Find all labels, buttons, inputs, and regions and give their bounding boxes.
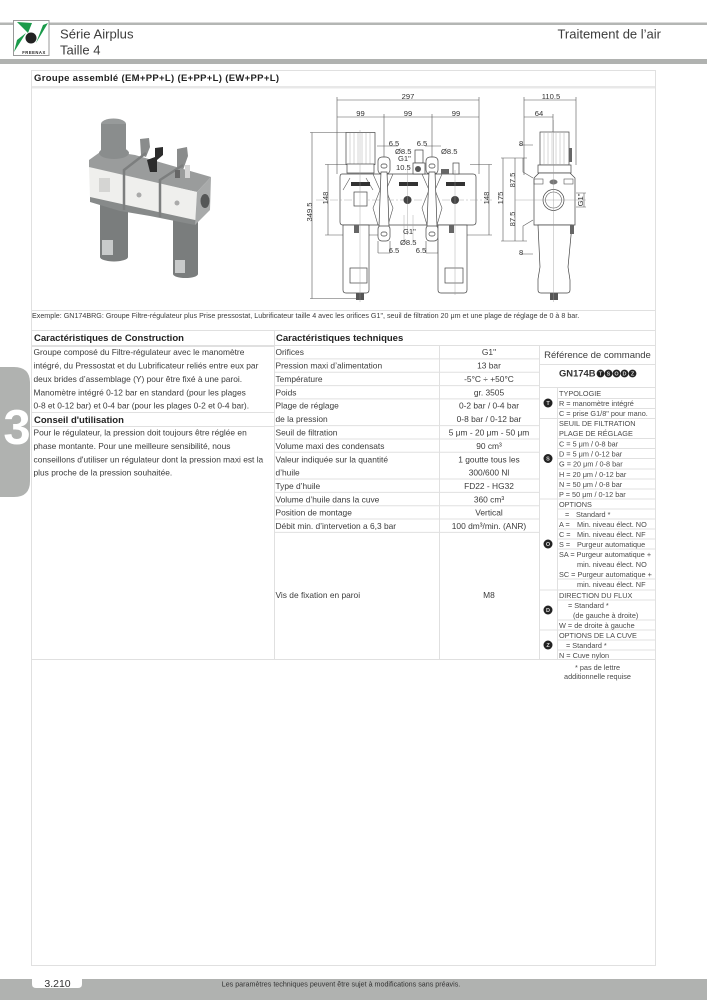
order key options: Min. niveau élect. NO [577, 520, 647, 529]
order key options: = [565, 510, 569, 519]
order key options: SEUIL DE FILTRATION [559, 419, 636, 428]
footer band [0, 979, 707, 1000]
order key options: Standard * [576, 510, 611, 519]
technical table labels: Type d’huile [276, 481, 321, 491]
text: usage advice: Pour le régulateur, la pression doit toujours être réglée en [34, 428, 247, 438]
straps [124, 153, 183, 217]
text: construction description: 0-8 et 0-12 bar) et 0-4 bar (pour les plages 0-2 et 0-4 bar). [34, 401, 249, 411]
technical table values: gr. 3505 [474, 387, 504, 397]
text: usage advice: phase montante. Pour une meilleure sensibilité, nous [34, 441, 230, 451]
technical table values: 100 dm³/min. (ANR) [452, 521, 526, 531]
dimension values: Ø8.5 [400, 238, 416, 247]
technical table labels: Poids [276, 387, 296, 397]
bowl side [538, 225, 572, 293]
technical table labels: Pression maxi d’alimentation [276, 360, 382, 370]
dimension values side [496, 92, 585, 257]
technical table values: 90 cm³ [476, 441, 502, 451]
body top [89, 150, 211, 192]
title: series: Série Airplus [60, 26, 134, 42]
lower strip [90, 197, 195, 225]
heading: construction: Caractéristiques de Construction [34, 333, 184, 344]
technical table labels: Débit min. d’intervetion a 6,3 bar [276, 521, 396, 531]
order key options: N = 50 μm / 0-8 bar [559, 480, 623, 489]
order key options: = Standard * [568, 601, 609, 610]
heading underline [32, 86, 655, 88]
technical table labels: de la pression [276, 414, 328, 424]
order key options: P = 50 μm / 0-12 bar [559, 490, 626, 499]
order code: T [599, 372, 603, 378]
filter and lubricator bowls [343, 225, 369, 293]
page number [32, 978, 82, 990]
order key bullets: D [546, 608, 550, 614]
dimension values: 6.5 [389, 246, 399, 255]
body side [534, 173, 575, 225]
left bowl [100, 200, 128, 257]
order key options: DIRECTION DU FLUX [559, 591, 633, 600]
header bar top [0, 22, 707, 25]
order key options: A = [559, 520, 570, 529]
bracket tabs [140, 138, 150, 157]
text: construction description: intégré, du Pressostat et du Lubrificateur reliés entre eux par [34, 360, 259, 370]
body blocks [340, 174, 476, 225]
cap [101, 118, 126, 130]
dimension values side: G1" [576, 193, 585, 206]
logo: Freenax: FREENAX [22, 50, 46, 55]
technical table values: 1 goutte tous les [458, 454, 520, 464]
technical table labels: Position de montage [276, 508, 352, 518]
order key options: W = de droite à gauche [559, 621, 635, 630]
main panel frame [32, 70, 656, 966]
dimension values: 297 [402, 92, 414, 101]
technical table labels: Volume maxi des condensats [276, 441, 384, 451]
dimension values: G1" [398, 154, 411, 163]
order key options: H = 20 μm / 0-12 bar [559, 470, 627, 479]
side tab: chapter 3: 3 [3, 401, 31, 455]
technical table labels: Valeur indiquée sur la quantité [276, 454, 388, 464]
dimension values: 6.5 [389, 139, 399, 148]
order code: S [607, 372, 611, 378]
order key options: OPTIONS DE LA CUVE [559, 631, 637, 640]
technical table values [449, 347, 529, 600]
dimension values side: 175 [496, 192, 505, 204]
text: construction description: Manomètre intégré 0-12 bar en standard (pour les plages [34, 387, 246, 397]
dimension values: 99 [404, 109, 412, 118]
order key options: min. niveau élect. NF [577, 580, 646, 589]
technical table labels: Plage de réglage [276, 401, 339, 411]
technical drawing: side view [496, 92, 586, 302]
technical table labels [276, 347, 396, 600]
technical table values: 0-2 bar / 0-4 bar [459, 401, 519, 411]
technical table values: G1" [482, 347, 496, 357]
technical table labels: Température [276, 374, 323, 384]
heading: usage advice: Conseil d'utilisation [34, 415, 124, 426]
dimension values: 6.5 [417, 139, 427, 148]
table grid lines [32, 310, 655, 660]
order code: D [623, 372, 627, 378]
order key footnote: * pas de lettre [575, 663, 620, 672]
order key options: SA = Purgeur automatique + [559, 550, 651, 559]
technical table values: -5°C ÷ +50°C [464, 374, 514, 384]
regulator cap [346, 132, 375, 164]
order code: O [614, 372, 619, 378]
order key options: N = Cuve nylon [559, 651, 609, 660]
dimension values side: 110.5 [542, 92, 560, 101]
order code: GN174B [559, 368, 596, 378]
fittings [175, 170, 180, 178]
page number: 3.210 [44, 978, 71, 990]
order key footnote [564, 663, 631, 681]
pressure switch [147, 147, 163, 172]
pressure switch [415, 150, 423, 163]
dimension values: 99 [452, 109, 460, 118]
order key options: C = 5 μm / 0-8 bar [559, 440, 619, 448]
order key bullets: S [546, 456, 550, 462]
dimension values side: 64 [535, 109, 543, 118]
dimension values: 10.5 [396, 163, 411, 172]
subtitle: size: Taille 4 [60, 42, 100, 58]
order key options: Min. niveau élect. NF [577, 530, 646, 539]
order key bullets [544, 398, 552, 650]
technical table labels: Volume d’huile dans la cuve [276, 494, 380, 504]
order key options: min. niveau élect. NO [577, 560, 647, 569]
order reference heading: Référence de commande [544, 350, 651, 361]
text: usage advice: plus proche de la pression souhaitée. [34, 468, 172, 478]
text: construction description: deux brides d’assemblage (Y) pour être fixé à une paroi. [34, 374, 242, 384]
labels on blocks [351, 182, 370, 186]
order code [559, 368, 636, 378]
dimension values: Ø8.5 [441, 147, 457, 156]
dimension lines [310, 97, 492, 298]
right side [195, 177, 211, 225]
order key options: G = 20 μm / 0-8 bar [559, 460, 623, 468]
heading: technical characteristics: Caractéristiques techniques [276, 333, 403, 344]
technical table labels: Vis de fixation en paroi [276, 590, 360, 600]
technical table values: 360 cm³ [474, 494, 504, 504]
section title: Traitement de l’air [557, 26, 662, 42]
text: construction description: Groupe composé du Filtre-régulateur avec le manomètre [34, 347, 245, 357]
technical table values: 5 μm - 20 μm - 50 μm [449, 428, 529, 438]
dimension values side: 87.5 [508, 212, 517, 226]
text: usage advice: conseillons d'utiliser un régulateur dont la pression maxi est la [34, 454, 264, 464]
right bowl [173, 220, 198, 274]
dimension values: G1" [403, 227, 416, 236]
brackets [378, 157, 438, 241]
order key options: (de gauche à droite) [573, 611, 638, 620]
white front [89, 167, 197, 221]
order key bullets: O [546, 542, 551, 548]
technical table labels: d’huile [276, 468, 300, 478]
order key bullets: Z [546, 643, 550, 649]
dimension values: 148 [321, 192, 330, 204]
order key options: D = 5 μm / 0-12 bar [559, 450, 623, 458]
order key options [559, 389, 652, 660]
dimension values [305, 92, 491, 255]
order key options: Purgeur automatique [577, 540, 645, 549]
side tab: chapter 3 [0, 367, 31, 497]
order key options: C = prise G1/8" pour mano. [559, 409, 648, 418]
technical table values: 300/600 Nl [469, 468, 509, 478]
dimension values: 99 [356, 109, 365, 118]
order key options: S = [559, 540, 570, 549]
order key options: OPTIONS [559, 500, 592, 509]
footer note: Les paramètres techniques peuvent être sujet à modifications sans préavis. [222, 980, 460, 988]
dimension values: 6.5 [416, 246, 426, 255]
dimension values side: 87.5 [508, 173, 517, 187]
details [136, 192, 142, 198]
product photo [89, 118, 211, 278]
order key options: R = manomètre intégré [559, 399, 634, 408]
panel heading: Groupe assemblé (EM+PP+L) (E+PP+L) (EW+PP+L) [34, 73, 279, 84]
header bar bottom [0, 59, 707, 64]
order key options: = Standard * [566, 641, 607, 650]
logo: Freenax [14, 20, 49, 56]
technical table values: Vertical [475, 508, 503, 518]
technical table values: 13 bar [477, 360, 501, 370]
dimension values: 349.5 [305, 202, 314, 222]
dimension values side: 8 [519, 139, 523, 148]
dimension values: 148 [482, 192, 491, 204]
order key bullets: T [546, 401, 550, 407]
technical table values: 0-8 bar / 0-12 bar [457, 414, 522, 424]
order key options: C = [559, 530, 571, 539]
order code: Z [631, 372, 635, 378]
technical drawing: front view [305, 92, 493, 302]
technical table labels: Seuil de filtration [276, 428, 338, 438]
example caption: Exemple: GN174BRG: Groupe Filtre-régulateur plus Prise pressostat, Lubrificateur taille 4 avec les orifices G1", seuil de filtration 20 μm et une plage de réglage de 0 à 8 bar. [32, 312, 579, 320]
order key options: SC = Purgeur automatique + [559, 570, 652, 579]
order key options: PLAGE DE RÉGLAGE [559, 429, 633, 438]
dimension values: Ø8.5 [395, 147, 411, 156]
technical table values: M8 [483, 590, 495, 600]
technical table labels: Orifices [276, 347, 304, 357]
order key footnote: additionnelle requise [564, 672, 631, 681]
regulator cap side [540, 132, 569, 165]
technical table values: FD22 - HG32 [464, 481, 514, 491]
order key options: TYPOLOGIE [559, 389, 601, 398]
dimension values side: 8 [519, 248, 523, 257]
